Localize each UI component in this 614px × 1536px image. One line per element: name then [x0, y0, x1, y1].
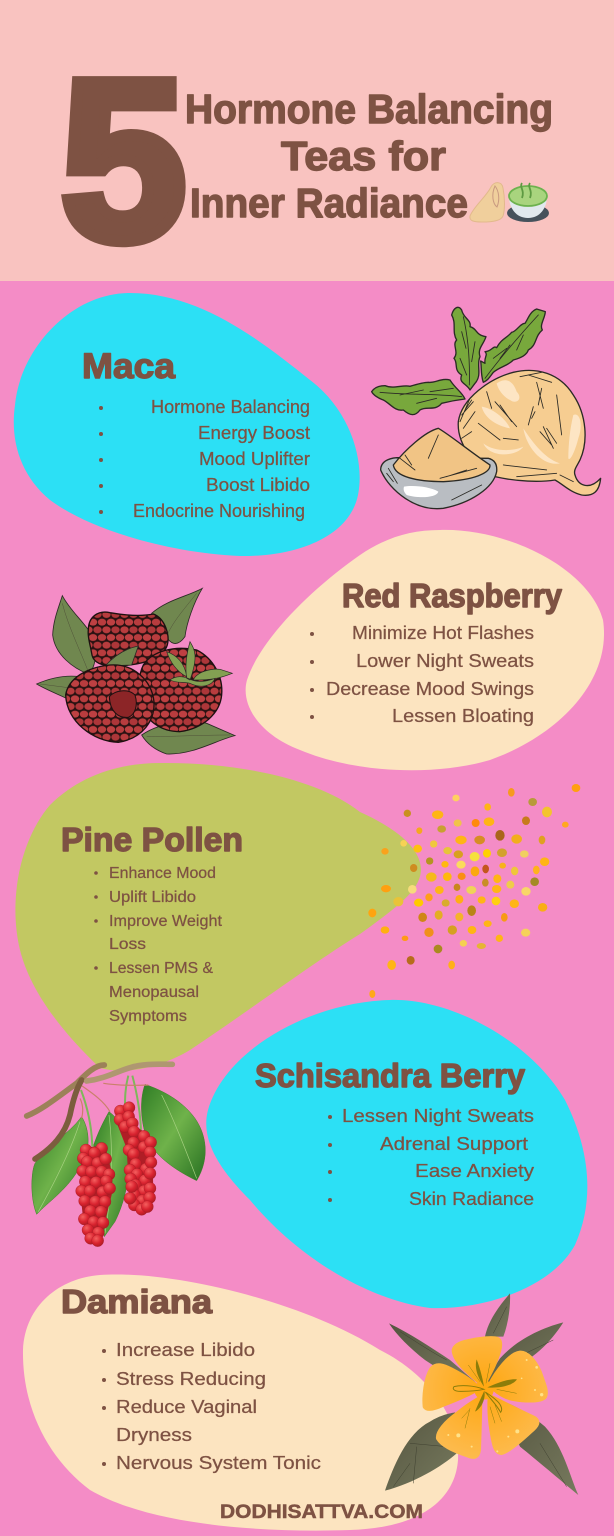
list: maca benefits: Endocrine Nourishing	[133, 501, 305, 521]
numeral 5: 5	[61, 34, 186, 288]
list: pine pollen benefits: Lessen PMS &	[109, 960, 214, 977]
title: Teas for	[281, 133, 446, 179]
icon: green tea cup	[507, 183, 549, 222]
panel: damiana	[23, 1274, 458, 1531]
heading: damiana: Damiana	[61, 1283, 213, 1320]
list: maca benefits: Energy Boost	[198, 423, 310, 443]
illustration: damiana flower	[385, 1293, 578, 1495]
list: pine pollen benefits: Loss	[109, 936, 146, 953]
list: pine pollen benefits: Symptoms	[109, 1008, 187, 1025]
icon: flexed arm	[470, 183, 504, 222]
heading: maca: Maca	[82, 347, 176, 386]
list: damiana benefits: Reduce Vaginal	[116, 1397, 257, 1417]
illustration: maca root and powder	[372, 307, 601, 509]
heading: red raspberry: Red Raspberry	[342, 577, 563, 614]
list: damiana benefits: Dryness	[116, 1425, 192, 1445]
list: maca benefits	[99, 397, 310, 521]
title	[185, 86, 553, 226]
panel: pine pollen	[15, 763, 421, 1071]
list: damiana benefits	[102, 1340, 321, 1473]
illustration: schisandra branch	[27, 1064, 205, 1247]
heading: pine pollen: Pine Pollen	[61, 821, 243, 858]
list: pine pollen benefits: Uplift Libido	[109, 889, 196, 906]
list: raspberry benefits: Decrease Mood Swings	[326, 679, 534, 699]
berry cluster: right	[114, 1102, 157, 1215]
panel: schisandra berry	[206, 1000, 587, 1308]
title: Hormone Balancing	[185, 86, 553, 132]
berry cluster: left	[76, 1142, 116, 1247]
list: pine pollen benefits: Improve Weight	[109, 913, 223, 930]
title: Inner Radiance	[190, 180, 468, 226]
list: schisandra benefits: Ease Anxiety	[415, 1161, 534, 1181]
list: schisandra benefits: Skin Radiance	[409, 1189, 534, 1209]
list: damiana benefits: Nervous System Tonic	[116, 1453, 321, 1473]
list: schisandra benefits: Lessen Night Sweats	[342, 1106, 534, 1126]
list: damiana benefits: Stress Reducing	[116, 1369, 266, 1389]
list: raspberry benefits: Minimize Hot Flashes	[352, 623, 534, 643]
list: pine pollen benefits: Menopausal	[109, 984, 199, 1001]
heading: schisandra berry: Schisandra Berry	[255, 1057, 526, 1094]
illustration: raspberries	[37, 588, 235, 754]
list: maca benefits: Mood Uplifter	[199, 449, 310, 469]
list: raspberry benefits: Lessen Bloating	[392, 706, 534, 726]
list: pine pollen benefits	[94, 865, 223, 1025]
list: schisandra benefits	[328, 1106, 534, 1209]
list: schisandra benefits: Adrenal Support	[380, 1134, 528, 1154]
list: pine pollen benefits: Enhance Mood	[109, 865, 216, 882]
panel: red raspberry	[246, 530, 604, 770]
footer: website: DODHISATTVA.COM	[220, 1501, 423, 1523]
list: raspberry benefits: Lower Night Sweats	[356, 651, 534, 671]
illustration: pollen grains	[368, 784, 580, 998]
header band	[0, 0, 614, 288]
list: raspberry benefits	[310, 623, 534, 726]
list: damiana benefits: Increase Libido	[116, 1340, 255, 1360]
list: maca benefits: Boost Libido	[206, 475, 310, 495]
list: maca benefits: Hormone Balancing	[151, 397, 310, 417]
panel: maca	[14, 293, 360, 556]
